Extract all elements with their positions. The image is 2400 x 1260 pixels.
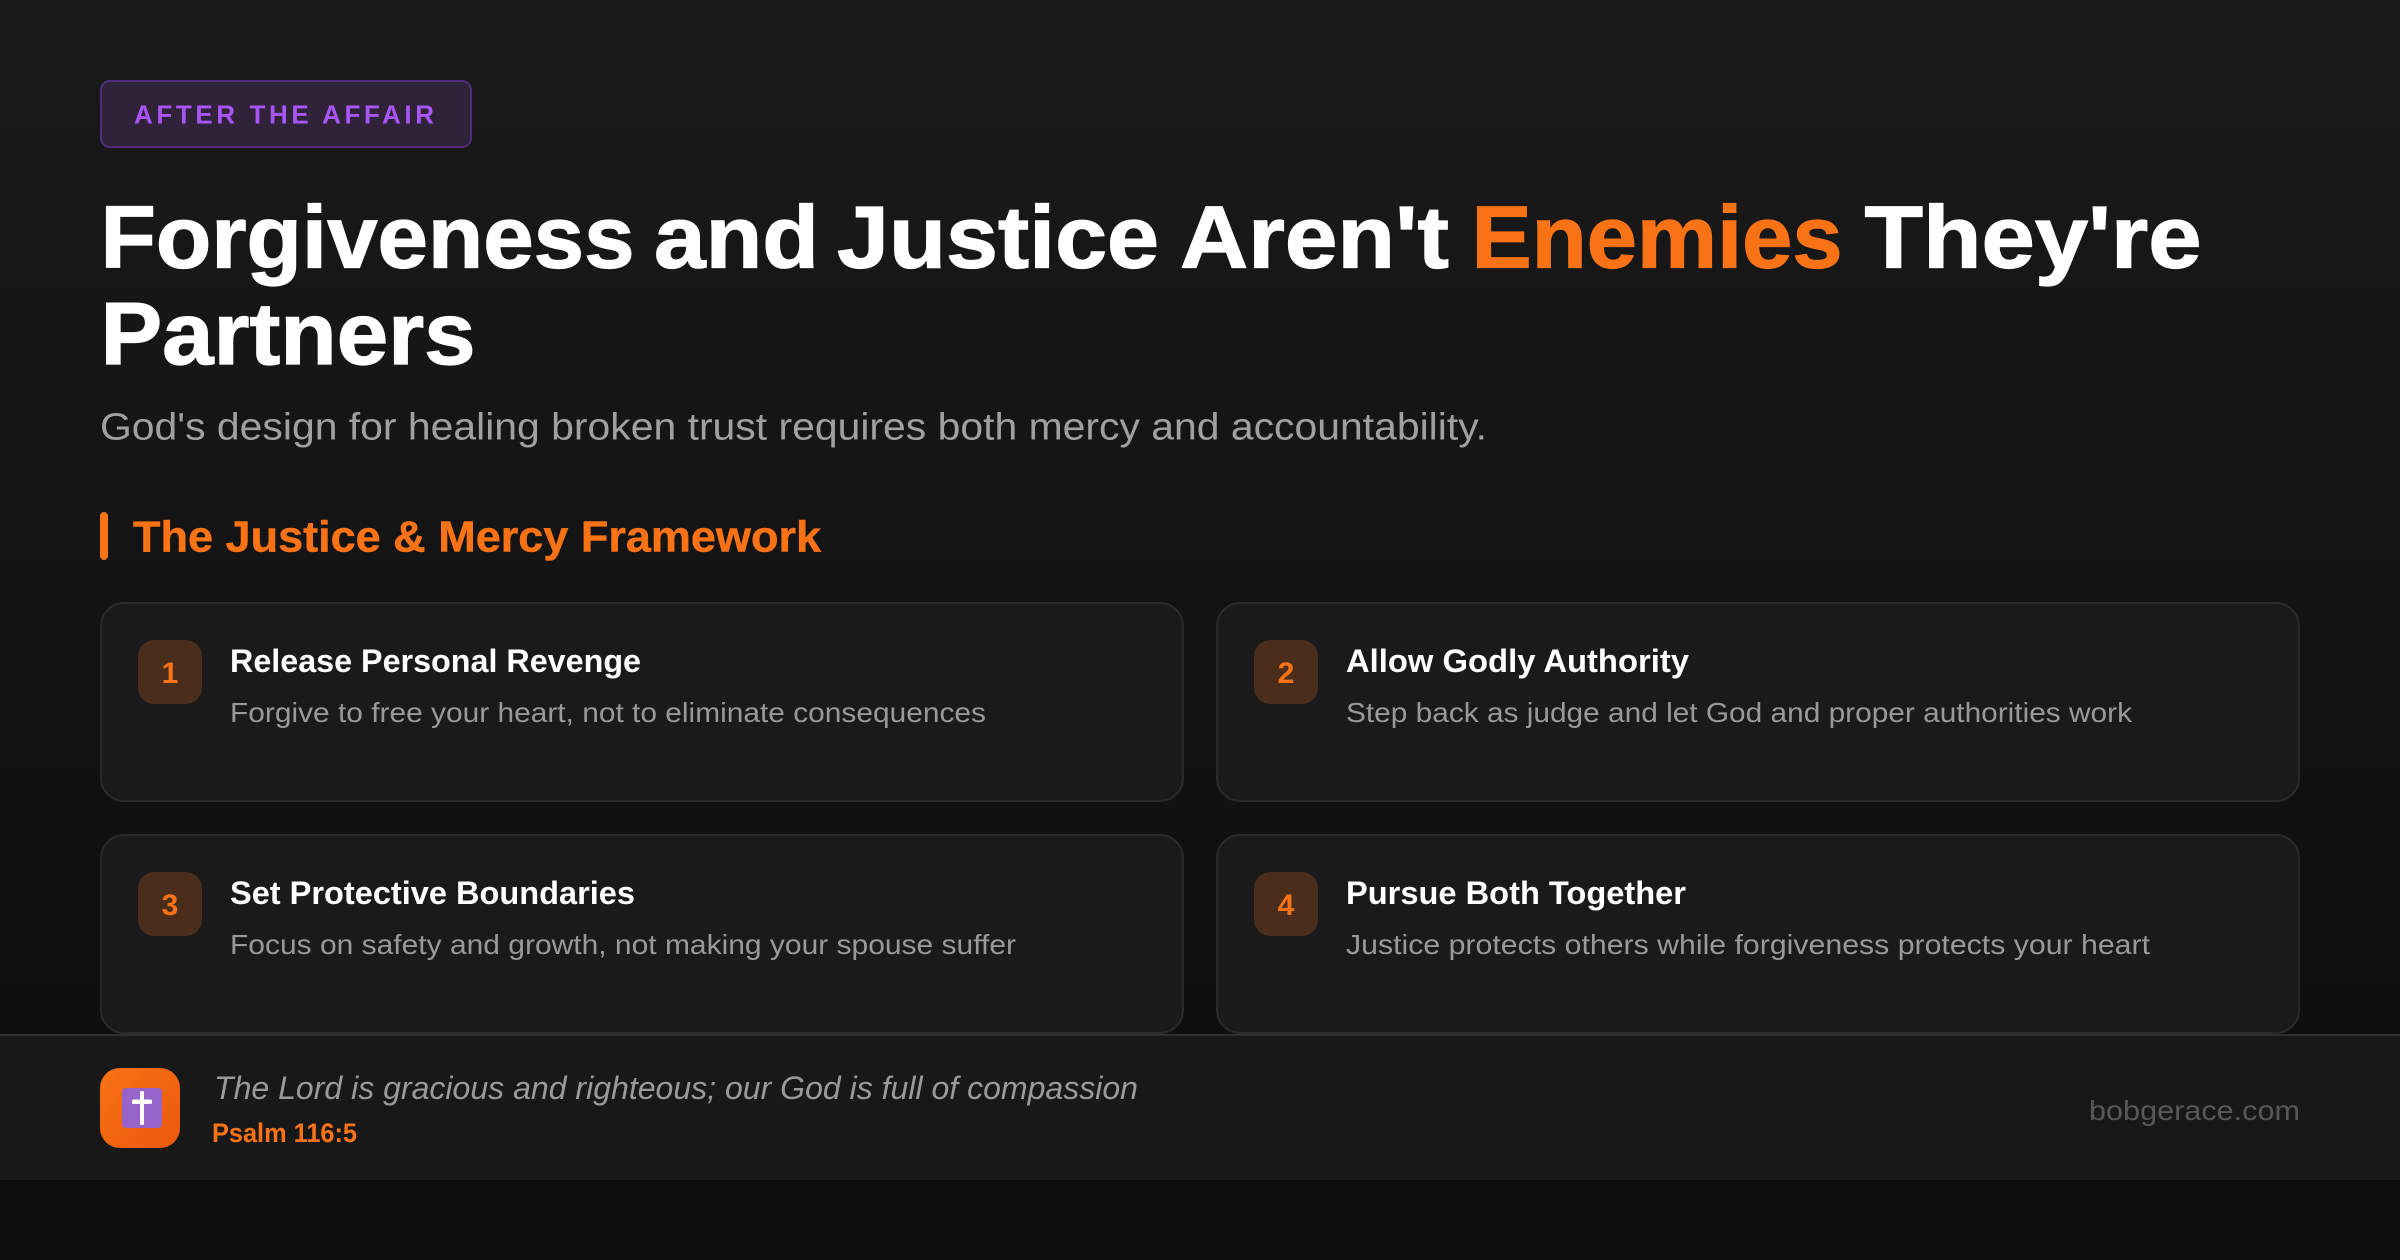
title: Aren't	[1180, 188, 1449, 286]
card description 2: Step back as judge and let God and proper authorities work	[1346, 697, 2133, 728]
number badge 2: 2	[1278, 657, 1294, 690]
card description 1: Forgive to free your heart, not to eliminate consequences	[230, 697, 986, 728]
panel: card 2	[1217, 603, 2299, 801]
panel: card 3	[101, 835, 1183, 1033]
card title 2: Allow Godly Authority	[1346, 643, 1689, 679]
card title 4: Pursue Both Together	[1346, 875, 1686, 911]
number badge 1	[138, 640, 202, 704]
scripture quote: The Lord is gracious and righteous; our God is full of compassion	[214, 1070, 1138, 1106]
scripture reference: Psalm 116:5	[212, 1118, 357, 1148]
number badge 3: 3	[162, 889, 178, 922]
title: Partners	[100, 284, 476, 383]
panel: card 4	[1217, 835, 2299, 1033]
panel: card 1	[101, 603, 1183, 801]
card description 4: Justice protects others while forgiveness protects your heart	[1346, 929, 2150, 960]
title: Enemies	[1472, 188, 1842, 286]
badge: after the affair	[101, 81, 471, 147]
title: They're	[1864, 188, 2202, 286]
number badge 2	[1254, 640, 1318, 704]
badge: after the affair: AFTER THE AFFAIR	[134, 100, 434, 130]
section heading: The Justice & Mercy Framework	[133, 512, 822, 562]
number badge 1: 1	[162, 657, 178, 690]
title: Forgiveness	[100, 188, 634, 286]
title	[100, 188, 2202, 383]
panel: footer	[0, 1034, 2400, 1180]
title: Justice	[837, 188, 1159, 286]
icon: cross	[100, 1068, 180, 1148]
card title 1: Release Personal Revenge	[230, 643, 641, 679]
number badge 4	[1254, 872, 1318, 936]
subtitle: God's design for healing broken trust requires both mercy and accountability.	[100, 406, 1487, 448]
number badge 3	[138, 872, 202, 936]
website: bobgerace.com	[2089, 1095, 2300, 1126]
number badge 4: 4	[1278, 889, 1295, 922]
card title 3: Set Protective Boundaries	[230, 875, 635, 911]
card description 3: Focus on safety and growth, not making your spouse suffer	[230, 929, 1016, 960]
title: and	[654, 188, 819, 286]
